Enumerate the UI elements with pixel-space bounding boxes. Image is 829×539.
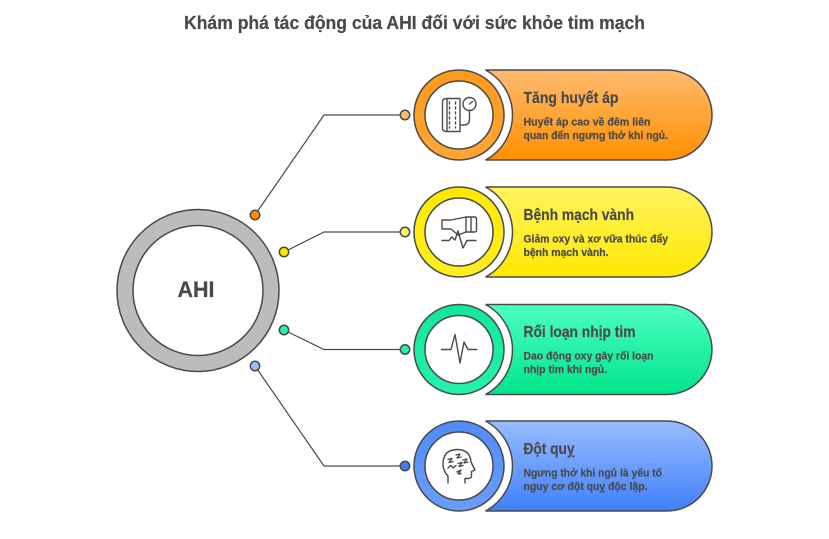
pill [486,304,712,394]
heading: Bệnh mạch vành [524,207,634,224]
endpoint dot [400,345,410,354]
panel: Bệnh mạch vành: bệnh mạch vành. [524,247,608,259]
description: Dao động oxy gây rối loạn [524,350,654,362]
connector: AHI to Đột quỵ [255,366,405,466]
icon: head with brain signals [443,450,475,483]
icon: artery and pulse [442,217,476,248]
panel: Rối loạn nhịp tim: nhịp tim khi ngủ. [524,364,607,376]
panel: Bệnh mạch vành [400,187,712,277]
endpoint dot [400,227,410,237]
connector: AHI to Tăng huyết áp [255,115,405,215]
icon: blood pressure cuff [442,98,476,132]
pill [486,187,712,277]
connector: AHI to Bệnh mạch vành [284,232,405,252]
heading: Rối loạn nhịp tim [524,324,636,341]
ring [414,304,504,394]
central node: AHI [117,210,279,372]
heading: Tăng huyết áp [524,90,618,107]
panel: Tăng huyết áp: quan đến ngưng thở khi ngủ. [524,130,668,142]
panel: Tăng huyết áp [400,70,712,160]
panel: Rối loạn nhịp tim [400,304,712,394]
description: Giảm oxy và xơ vữa thúc đẩy [524,234,669,246]
connector: AHI to Rối loạn nhịp tim [284,330,405,350]
central label: AHI [178,277,214,302]
panel: Đột quỵ [400,421,712,511]
endpoint dot [400,461,410,471]
panel: Đột quỵ: nguy cơ đột quỵ độc lập. [524,481,648,493]
pill [486,421,712,511]
endpoint dot [400,110,410,120]
node dots on central circle [250,210,289,371]
ring [414,70,504,160]
pill [486,70,712,160]
icon: heartbeat [442,334,477,363]
ring [414,187,504,277]
title: Khám phá tác động của AHI đối với sức khỏe tim mạch [184,13,645,33]
heading: Đột quỵ [524,441,575,458]
description: Ngưng thở khi ngủ là yếu tố [524,468,662,480]
description: Huyết áp cao về đêm liên [524,116,651,128]
ring [414,421,504,511]
